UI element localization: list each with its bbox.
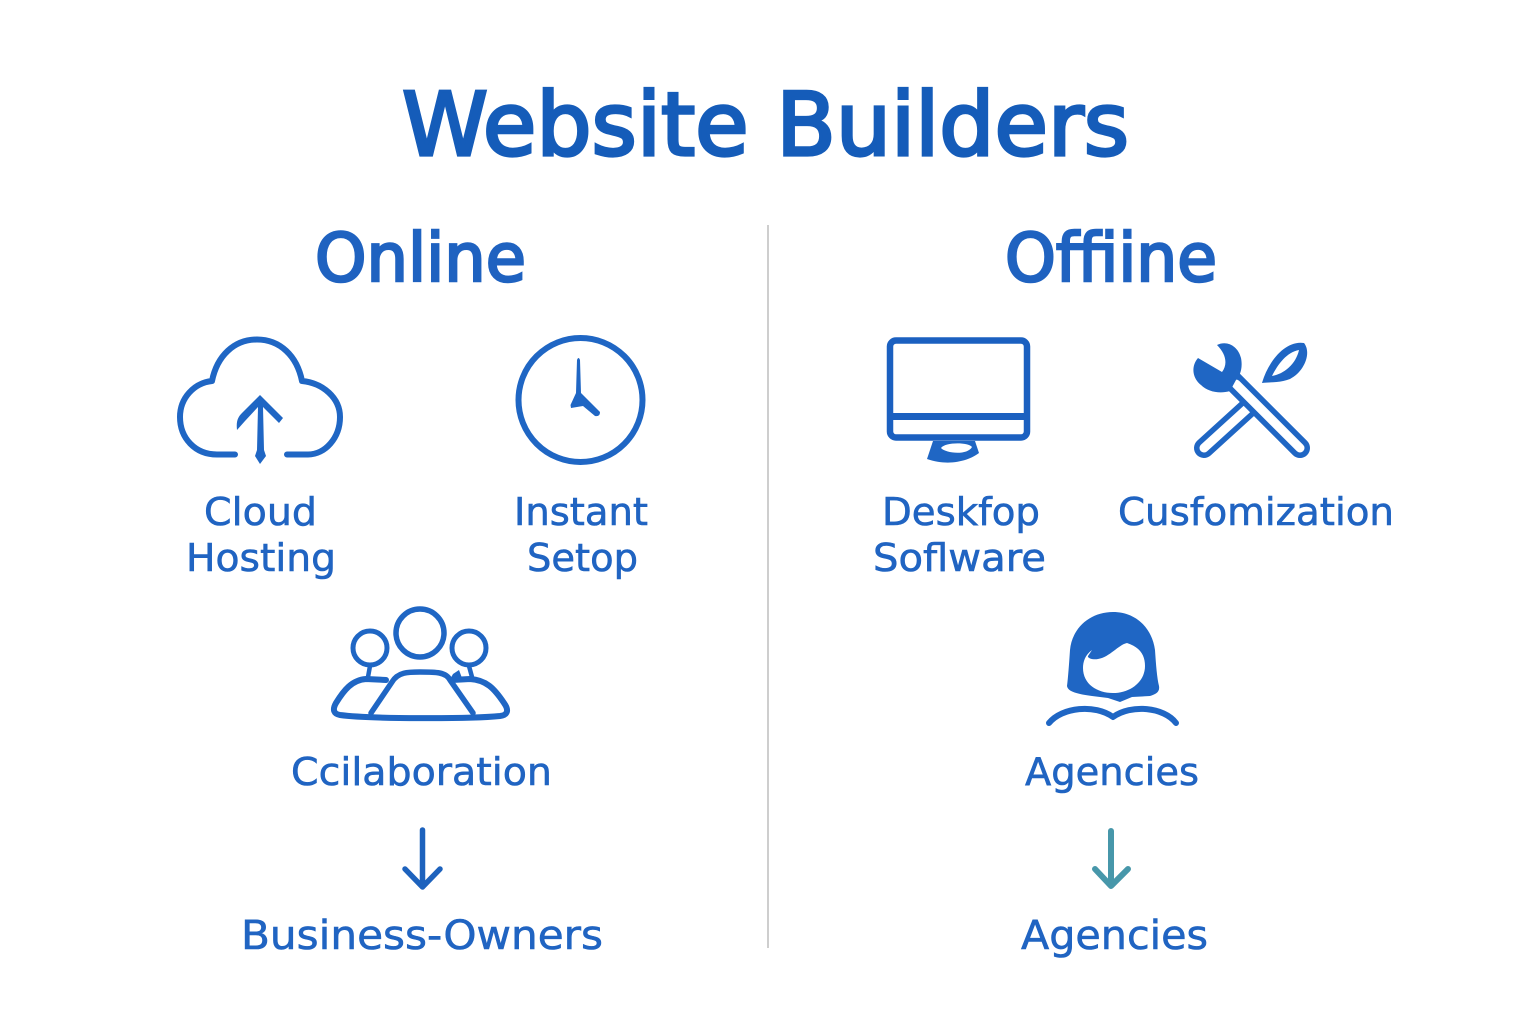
heading: online: Online [315, 219, 526, 297]
icon: desktop monitor [890, 340, 1027, 463]
label: instant setup [514, 490, 648, 580]
icon: cloud upload [180, 340, 340, 464]
label: agencies audience: Agencies [1021, 913, 1208, 959]
icon: clock [518, 338, 642, 462]
label: business owners: Business-Owners [241, 913, 603, 959]
panel: offline [873, 219, 1394, 959]
label: cloud hosting: Cloud [204, 490, 317, 534]
label: customization: Cusfomization [1118, 490, 1394, 534]
icon: wrench and feather tools [1193, 343, 1307, 448]
label: desktop software [873, 490, 1046, 580]
arrow: down to business owners [405, 830, 440, 887]
label: instant setup: Instant [514, 490, 648, 534]
icon: collaboration group [334, 609, 507, 718]
icon: person with book [1049, 612, 1176, 723]
label: instant setup: Setop [527, 536, 638, 580]
panel: online [180, 219, 648, 959]
label: desktop software: Soflware [873, 536, 1046, 580]
label: collaboration: Ccilaboration [291, 750, 552, 794]
label: agencies: Agencies [1025, 750, 1199, 794]
label: cloud hosting: Hosting [186, 536, 336, 580]
label: desktop software: Deskfop [882, 490, 1040, 534]
label: cloud hosting [186, 490, 336, 580]
arrow: down to agencies [1095, 831, 1128, 886]
title: Website Builders [402, 74, 1129, 176]
heading: offline: Offiine [1005, 219, 1217, 297]
